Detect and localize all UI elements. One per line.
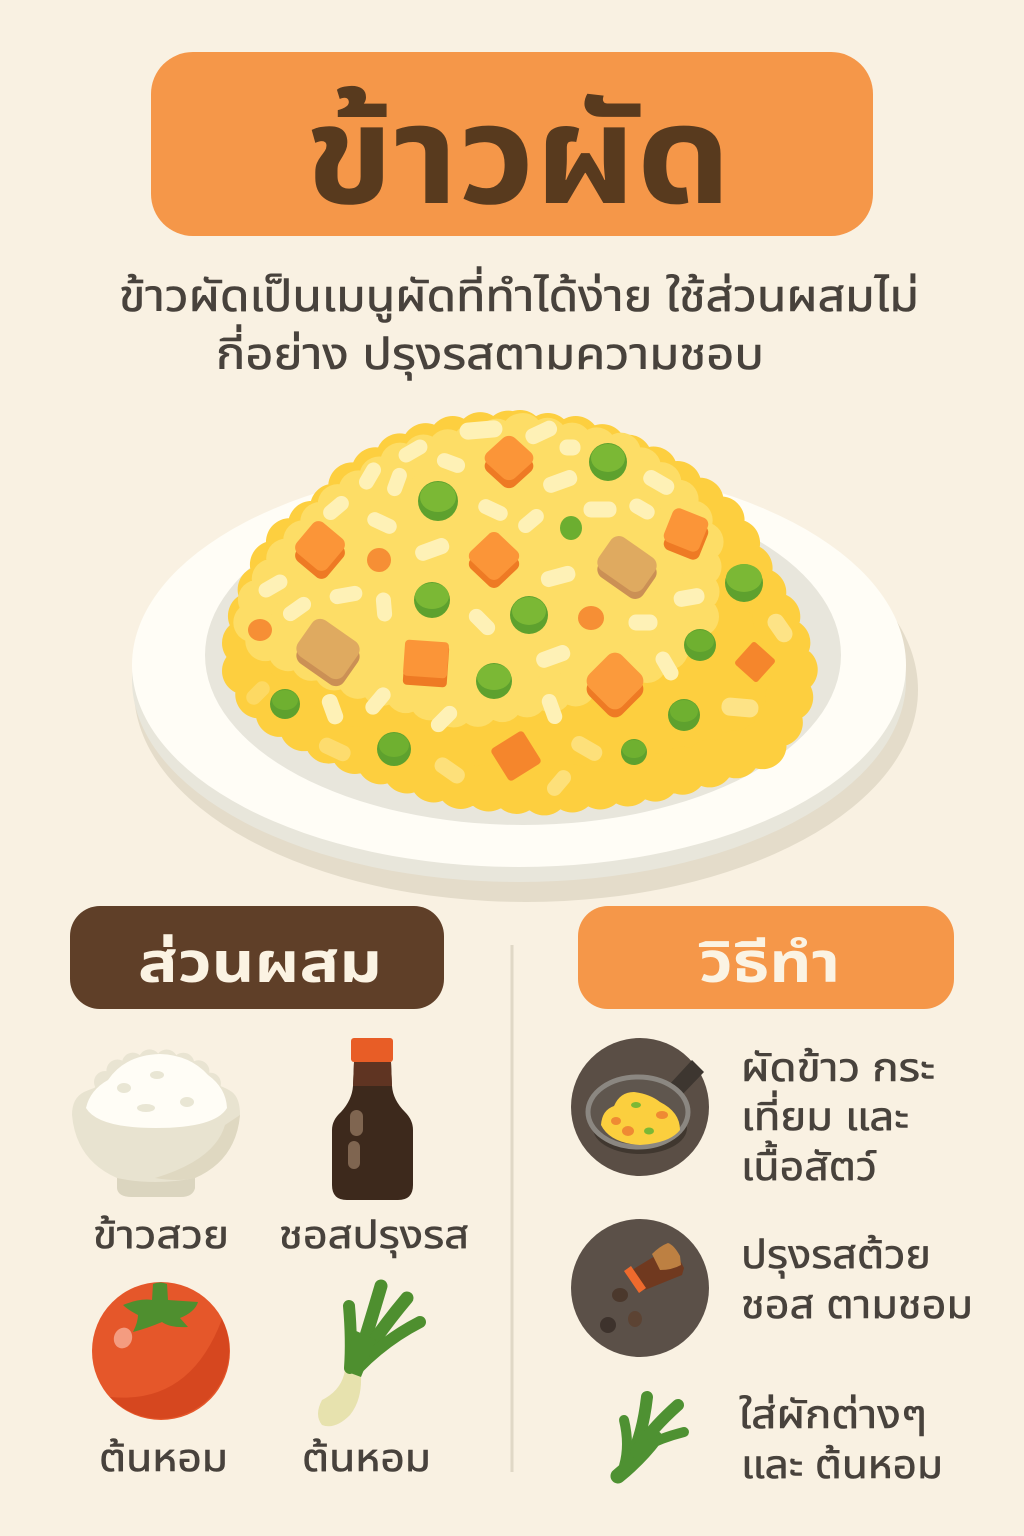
rice grains: [245, 420, 794, 797]
small carrot bits: [248, 548, 604, 641]
ingredient: rice bowl: [72, 1054, 240, 1197]
label: rice: ข้าวสวย: [93, 1215, 229, 1257]
ingredients heading: ส่วนผสม: [138, 931, 382, 994]
meat cubes: [292, 532, 661, 690]
fried rice plate illustration: [132, 420, 918, 902]
ingredient: sauce bottle: [332, 1038, 413, 1200]
ingredients heading: [70, 906, 444, 1009]
step 1 icon: pan: [571, 1038, 709, 1176]
rice mound: [246, 433, 794, 792]
plate: [132, 463, 918, 902]
step 3 text: [739, 1394, 943, 1487]
step 2 icon: seasoning: [571, 1219, 709, 1357]
step 3 icon: herb: [618, 1397, 684, 1476]
carrot cubes: [292, 433, 776, 782]
title banner: [151, 52, 873, 236]
intro text: ข้าวผัดเป็นเมนูผัดที่ทำได้ง่าย ใช้ส่วนผสมไม่: [119, 266, 919, 323]
step 1 text: เที่ยม และ: [741, 1090, 909, 1139]
step 2 text: [741, 1234, 973, 1327]
label: sauce: ชอสปรุงรส: [279, 1215, 469, 1258]
method heading: วิธีทำ: [698, 931, 840, 994]
divider: [510, 945, 514, 1472]
step 1 text: เนื้อสัตว์: [741, 1140, 877, 1189]
label: tomato: ต้นหอม: [99, 1438, 228, 1480]
step 1 text: [741, 1047, 935, 1189]
step 3 text: และ ต้นหอม: [741, 1444, 943, 1487]
method heading: [578, 906, 954, 1009]
step 2 text: ชอส ตามชอม: [741, 1284, 973, 1327]
step 2 text: ปรุงรสต้วย: [741, 1234, 931, 1278]
green peas: [270, 443, 763, 766]
ingredient: spring onion: [318, 1286, 420, 1426]
intro text: [119, 266, 919, 381]
label: spring onion: ต้นหอม: [302, 1438, 431, 1480]
title: ข้าวผัด: [305, 79, 731, 233]
ingredient: tomato: [92, 1282, 230, 1420]
intro text: กี่อย่าง ปรุงรสตามความชอบ: [216, 324, 764, 381]
step 3 text: ใส่ผักต่างๆ: [739, 1394, 927, 1437]
step 1 text: ผัดข้าว กระ: [741, 1047, 935, 1090]
